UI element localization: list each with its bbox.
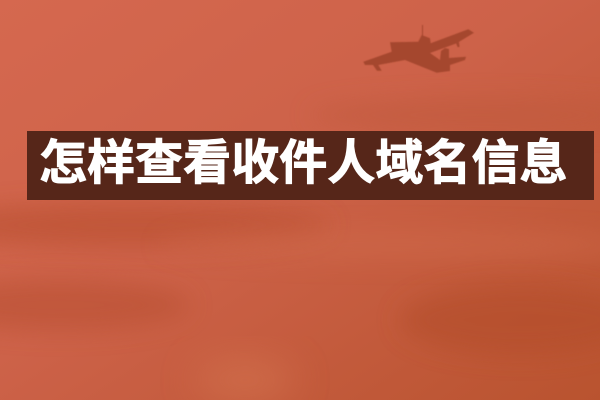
title text: 怎样查看收件人域名信息 [39, 137, 568, 190]
title banner [27, 131, 594, 200]
icon: airplane silhouette [363, 25, 474, 73]
